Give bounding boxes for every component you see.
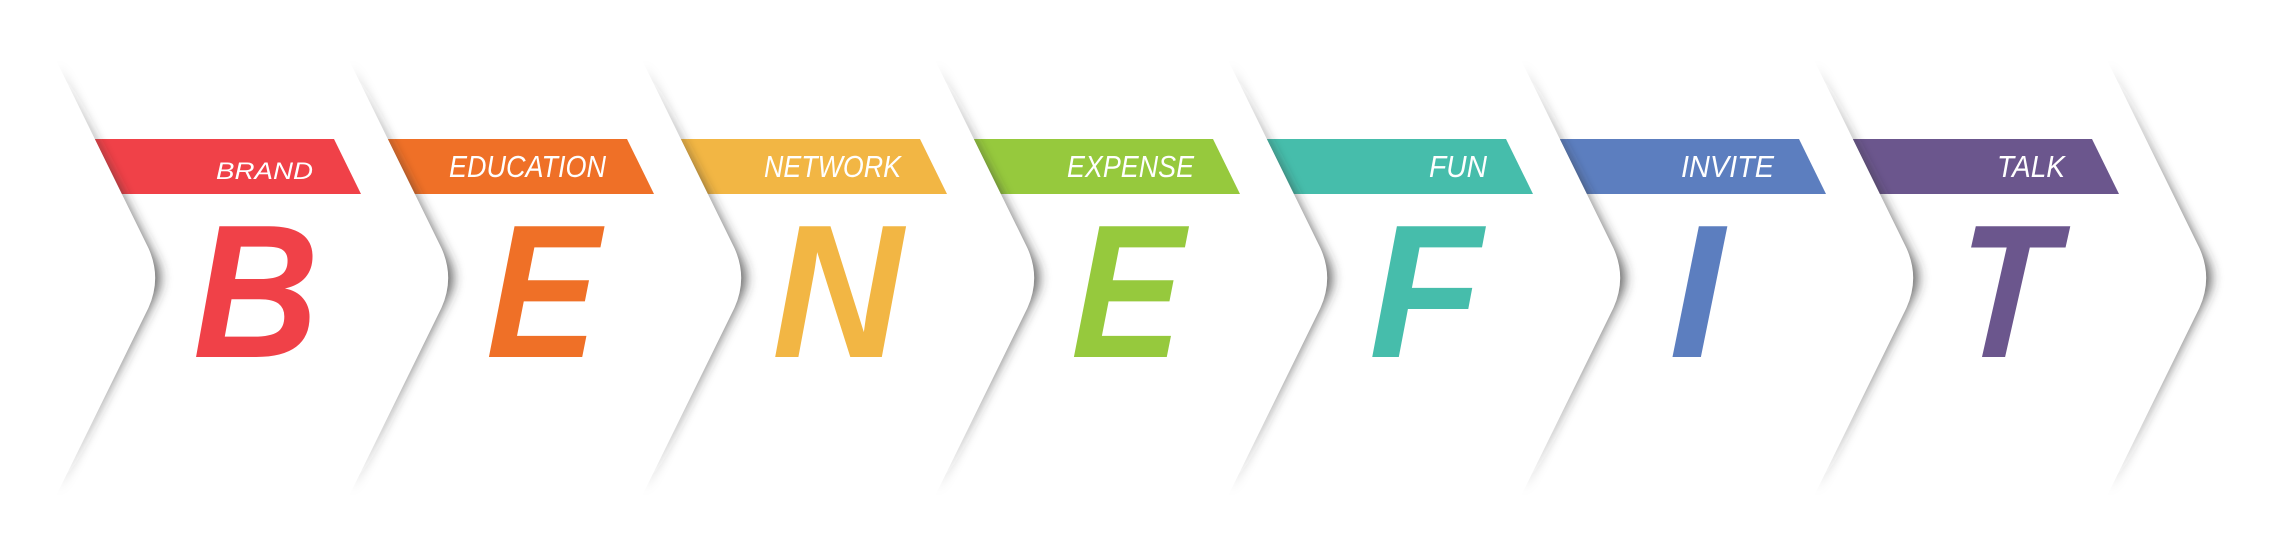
chevron: EDUCATION: [333, 50, 454, 506]
letter: N: N: [772, 186, 907, 398]
band: EDUCATION: [375, 139, 654, 194]
letter: I: I: [1669, 186, 1728, 398]
label: EXPENSE: EXPENSE: [1067, 150, 1195, 184]
letter: F: F: [1369, 186, 1487, 398]
chevron: TALK: [1798, 50, 1918, 506]
band: BRAND: [82, 139, 361, 194]
letter: B: B: [193, 186, 319, 398]
band: EXPENSE: [961, 139, 1240, 194]
label: INVITE: INVITE: [1681, 150, 1775, 184]
band: INVITE: [1547, 139, 1826, 194]
chevron: INVITE: [1505, 50, 1626, 506]
label: EDUCATION: EDUCATION: [449, 150, 607, 184]
label: BRAND: BRAND: [216, 158, 313, 185]
letter: E: E: [485, 186, 606, 398]
letter: E: E: [1070, 186, 1191, 398]
chevron end cap: [2091, 50, 2212, 506]
band: FUN: [1254, 139, 1533, 194]
chevron: EXPENSE: [919, 50, 1040, 506]
band: NETWORK: [668, 139, 947, 194]
step: INVITE: [1505, 50, 1826, 506]
step: BRAND: [40, 50, 361, 506]
step: FUN: [1212, 50, 1533, 506]
chevron: FUN: [1212, 50, 1332, 506]
label: NETWORK: NETWORK: [764, 150, 902, 184]
chevron: BRAND: [40, 50, 160, 506]
chevron: NETWORK: [626, 50, 746, 506]
step: EDUCATION: [333, 50, 654, 506]
step: NETWORK: [626, 50, 947, 506]
label: FUN: FUN: [1429, 150, 1488, 184]
band: TALK: [1840, 139, 2119, 194]
step: EXPENSE: [919, 50, 1240, 506]
step: TALK: [1798, 50, 2119, 506]
letter: T: T: [1950, 186, 2073, 398]
label: TALK: TALK: [1997, 150, 2067, 184]
